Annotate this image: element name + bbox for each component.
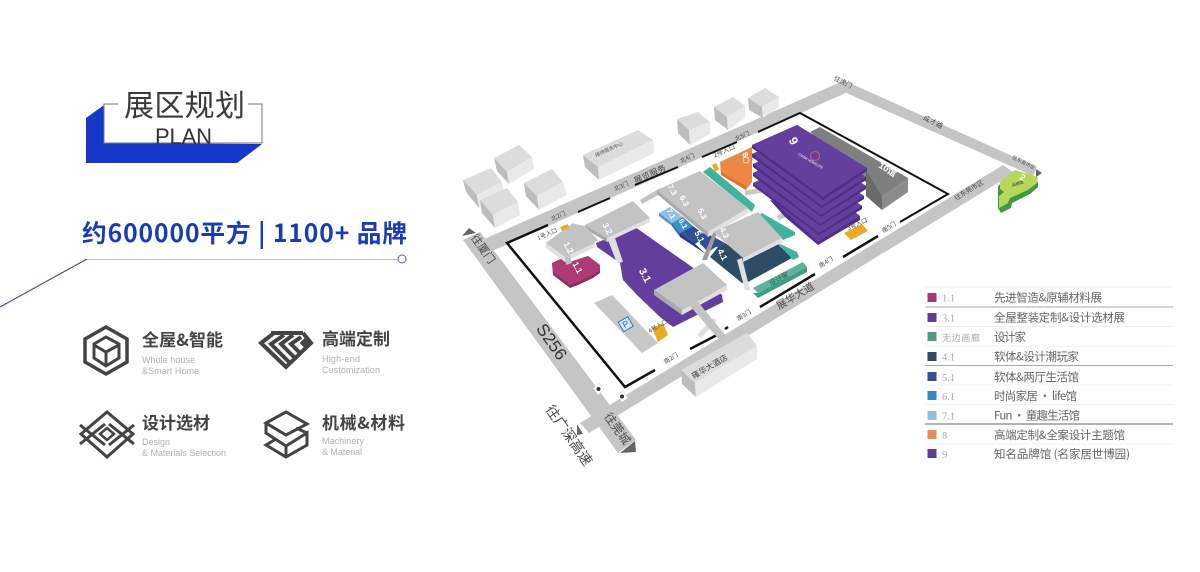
road and gate labels: 南4门: [817, 254, 835, 270]
english label line 2: &Smart Home: [142, 366, 199, 376]
legend row 4.1: 4.1: [942, 352, 955, 364]
hall number labels: [561, 183, 731, 285]
road and gate labels: 往虎门: [832, 72, 854, 90]
building label: 接待服务中心: [594, 140, 624, 159]
connectors to hall 9: [745, 190, 790, 218]
decorative leader line with circle: [0, 255, 406, 307]
road and gate labels: 展华大道: [773, 278, 817, 313]
hall 10: [810, 127, 908, 210]
legend row 1.1: [928, 290, 1102, 306]
entrance marker: [712, 163, 719, 172]
road and gate labels: [467, 72, 1036, 470]
legend row 3.1: 3.1: [942, 314, 955, 324]
road and gate labels: 往厦门: [467, 231, 499, 267]
parking icon: P: [621, 318, 631, 330]
legend row 5.1: 软体&两厅生活馆: [994, 369, 1079, 385]
hall number labels: 4.1: [715, 247, 730, 262]
hall number labels: 7.1: [665, 207, 678, 221]
legend row 6.1: 时尚家居 · life馆: [994, 388, 1077, 404]
design home hall: [753, 262, 807, 298]
hall number labels: 6.1: [677, 217, 690, 231]
road and gate labels: 北5门: [733, 128, 751, 143]
roads: [463, 81, 1037, 453]
legend row 4.1: 软体&设计潮玩家: [994, 348, 1080, 364]
icon: hexagon cube: [85, 327, 127, 374]
label: 机械&材料: [322, 409, 405, 434]
hall 8: [720, 147, 752, 190]
legend row 7.1: Fun · 童趣生活馆: [994, 408, 1080, 424]
hall 3.1: [596, 227, 723, 327]
surrounding buildings: [463, 88, 779, 228]
title blue backing shape: [86, 105, 262, 163]
hall number labels: 3.2: [600, 221, 615, 236]
road and gate labels: S256: [532, 320, 571, 364]
label: 设计选材: [142, 409, 210, 434]
headline stats: 约600000平方 | 1100+ 品牌: [82, 214, 407, 250]
legend row 6.1: [928, 388, 1077, 404]
hall number labels: 1.1: [570, 260, 585, 275]
teal strips: [703, 167, 795, 240]
hall 1.1: [552, 256, 600, 288]
legend: [925, 287, 1173, 462]
hall 9 logo ring: [810, 152, 820, 160]
road and gate labels: 北4门: [678, 150, 696, 165]
legend row design home: 无边画廊: [942, 331, 980, 344]
road arrows: [462, 169, 1042, 453]
road and gate labels: 南2门: [662, 350, 680, 366]
hall 9 stacked: CHINA HOMELIFE: [797, 152, 824, 171]
legend row 3.1: [928, 310, 1126, 326]
road and gate labels: 往东莞市区: [952, 177, 985, 202]
legend row design home: [928, 329, 1026, 345]
title english: PLAN: [155, 124, 212, 149]
parking lot: [594, 295, 658, 353]
hall number labels: 5.3: [696, 207, 709, 221]
road and gate labels: 北2门: [549, 208, 567, 223]
legend dividers: [925, 287, 1173, 444]
hall number labels: 4.3: [718, 226, 731, 240]
hall number labels: 7.3: [666, 183, 679, 197]
road and gate labels: 2号入口: [711, 141, 736, 160]
legend row 4.1: [928, 348, 1080, 364]
hall 8: 8: [740, 151, 750, 159]
legend row 8: 高端定制&全案设计主题馆: [994, 427, 1125, 443]
hall 8 ring mark: [743, 157, 749, 163]
legend row 7.1: 7.1: [942, 412, 955, 422]
hall number labels: 6.3: [678, 194, 691, 208]
icon: nested diamonds: [80, 412, 134, 457]
legend row design home: 设计家: [994, 329, 1026, 345]
road and gate labels: 展览服务: [632, 162, 668, 187]
road and gate labels: 南3门: [735, 307, 753, 323]
site map: [462, 72, 1042, 470]
english label line 2: & Material: [322, 447, 362, 457]
legend row 6.1: 6.1: [942, 392, 955, 403]
design home hall: 设计家: [767, 270, 791, 289]
category: machinery and material: [266, 409, 405, 457]
road and gate labels: 往东莞市区: [1011, 154, 1036, 171]
road and gate labels: 成才路: [921, 113, 945, 131]
icon: diamond: [261, 333, 311, 367]
road and gate labels: 往广深高速: [541, 401, 597, 470]
site boundary: [507, 113, 948, 387]
road and gate labels: 南5门: [880, 219, 898, 235]
small label 2 building: [998, 170, 1038, 213]
hall number labels: 5.1: [692, 229, 707, 244]
hall number labels: 3.1: [636, 266, 653, 285]
category: high-end customization: [261, 325, 390, 375]
road and gate labels: 往莞城: [600, 409, 635, 448]
category: design materials: [80, 409, 226, 458]
english label: Machinery: [322, 436, 364, 446]
title outline frame: [104, 104, 262, 143]
legend row 3.1: 全屋整装定制&设计选材展: [994, 310, 1126, 326]
legend row 7.1: [928, 408, 1080, 424]
legend row 8: [928, 427, 1125, 443]
legend row 9: 知名品牌馆 (名家居世博园): [994, 446, 1130, 462]
legend row 1.1: 先进智造&原辅材料展: [994, 290, 1102, 306]
legend row 1.1: 1.1: [942, 294, 955, 304]
hall row 7.1 to 4.1: [659, 207, 799, 283]
english label: Whole house: [142, 355, 195, 365]
yellow entrances: [560, 224, 868, 342]
hall number labels: 1.2: [561, 240, 576, 255]
traffic signs: [593, 383, 628, 402]
road and gate labels: 1号入口: [535, 225, 559, 242]
category: whole house: [85, 326, 223, 376]
hotel: [681, 333, 757, 397]
legend row 9: [928, 446, 1130, 462]
english label line 2: Customization: [322, 365, 380, 375]
label: 高端定制: [322, 325, 390, 350]
road and gate labels: 4号入口: [646, 317, 669, 335]
hotel label: 雍华大酒店: [690, 352, 730, 382]
road and gate labels: 北3门: [612, 178, 630, 193]
hall 10: 10馆: [877, 159, 899, 179]
title chinese: 展区规划: [124, 81, 245, 125]
english label: Design: [142, 437, 170, 447]
legend row 5.1: [928, 369, 1079, 385]
legend row 5.1: 5.1: [942, 373, 955, 384]
english label line 2: & Materials Selection: [142, 448, 226, 458]
road and gate labels: 3号入口: [845, 215, 869, 232]
hall 9 stacked: [752, 125, 867, 245]
legend row 9: 9: [942, 450, 947, 461]
icon: layered cube: [266, 412, 307, 457]
small label 2 building: 2: [1018, 172, 1027, 183]
small label 2 building: 品牌馆: [1011, 179, 1024, 188]
label: 全屋&智能: [142, 326, 223, 351]
legend row 8: 8: [942, 431, 947, 442]
title block: [86, 81, 262, 163]
hall 9 stacked: 9: [786, 135, 801, 148]
english label: High-end: [322, 354, 360, 364]
gray halls: [546, 171, 783, 343]
